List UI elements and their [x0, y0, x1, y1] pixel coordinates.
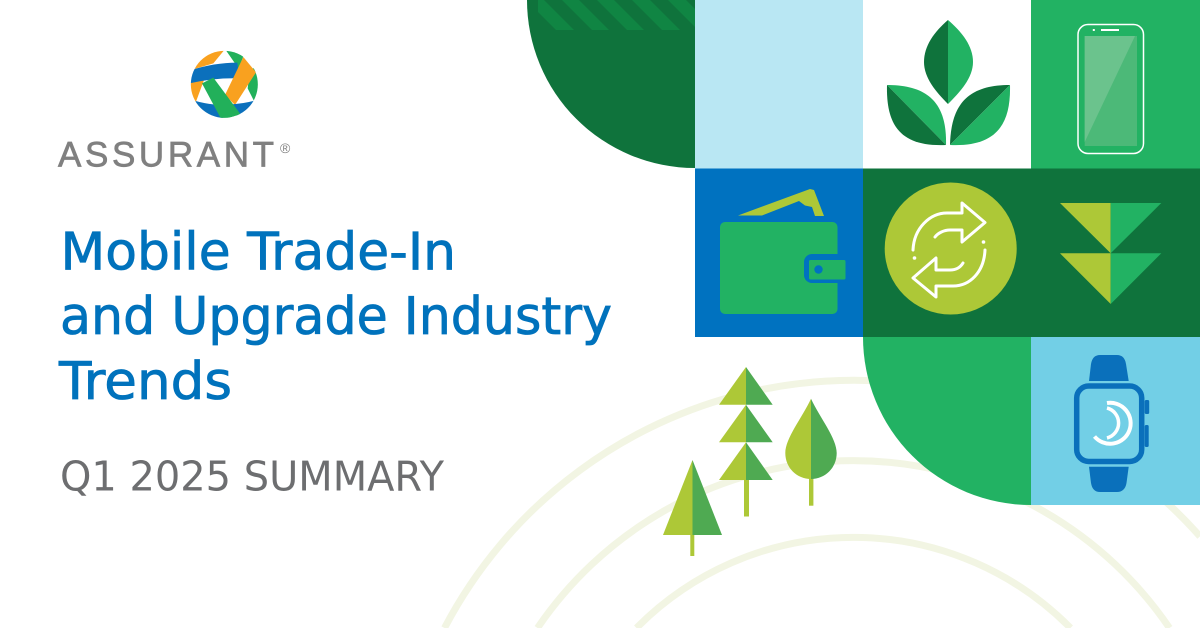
title: Mobile Trade-In: [60, 222, 456, 282]
icon: smartwatch: [1077, 355, 1149, 492]
icon: refresh arrows in lime circle: [885, 182, 1017, 314]
panel: dark green quarter circle: [527, 0, 695, 168]
logo wordmark: ASSURANT: [58, 136, 274, 174]
title: and Upgrade Industry: [60, 287, 612, 347]
icon: wallet: [720, 189, 846, 314]
icon: left triangular tree: [663, 460, 722, 556]
subtitle: Q1 2025 SUMMARY: [60, 453, 445, 501]
title: Trends: [58, 352, 232, 412]
panel: pale blue square: [695, 0, 863, 168]
background concentric arcs: [444, 380, 1200, 628]
icon: smartphone: [1078, 24, 1144, 154]
title: [58, 222, 612, 412]
logo: Assurant woven globe: [190, 50, 258, 118]
icon: tiered pine tree: [719, 367, 773, 516]
logo wordmark: ®: [280, 140, 291, 156]
icon: stacked triangles: [1060, 203, 1161, 304]
panel: green phone square: [1031, 0, 1200, 168]
icon: teardrop tree: [785, 399, 837, 506]
panel: green quarter circle: [863, 337, 1031, 505]
panel: blue wallet square: [695, 168, 863, 337]
panel: dark green band: [863, 168, 1200, 337]
icon: three leaves: [887, 20, 1010, 145]
panel: sky blue watch square: [1031, 337, 1200, 505]
